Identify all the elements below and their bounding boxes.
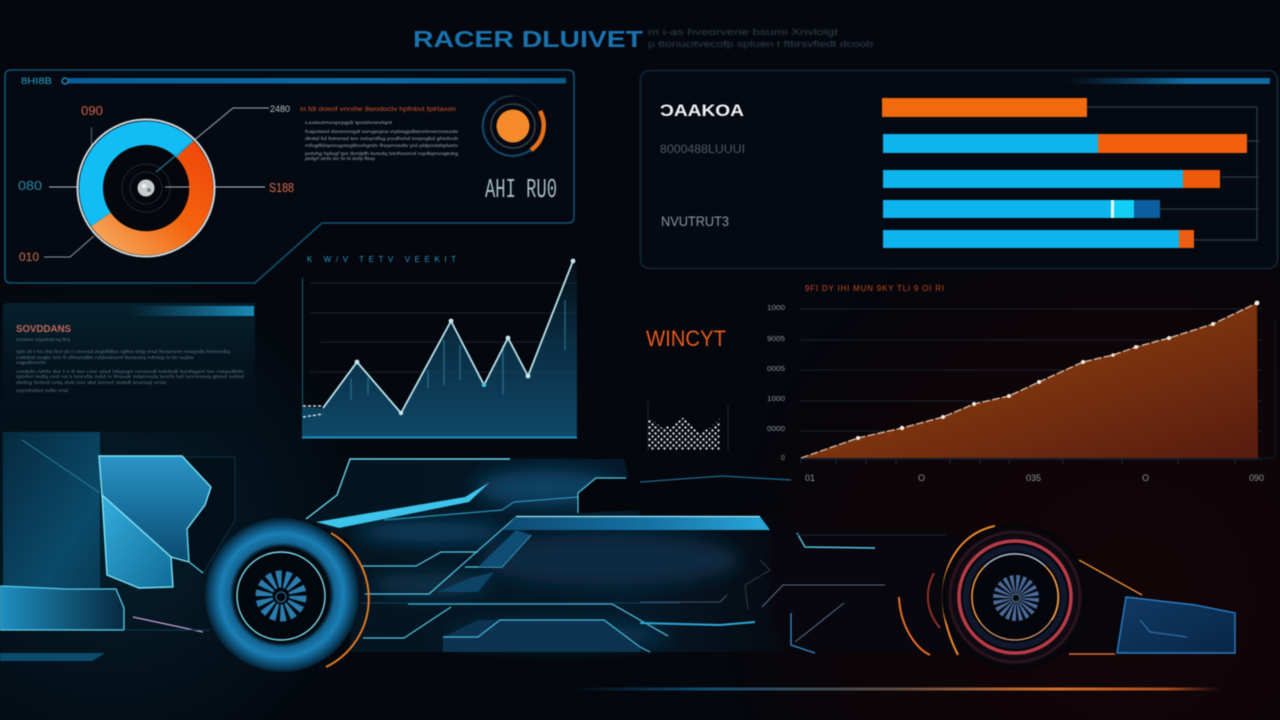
body text: vqnvlrdsvt tvfln vnd <box>16 388 69 393</box>
x-axis labels: 01 <box>805 473 815 483</box>
lower streak <box>0 653 105 661</box>
y-axis labels <box>767 305 785 462</box>
central bright band <box>503 516 770 530</box>
bar labels: NVUTRUT3 <box>661 213 729 229</box>
nose grey lines <box>640 560 885 642</box>
bar labels: ƆAAKOA <box>660 101 744 120</box>
grid and axis <box>302 278 577 438</box>
rim <box>972 554 1058 640</box>
rear wing upper <box>99 456 211 562</box>
bar 2 <box>883 134 1247 153</box>
body text: rptvfvn tvdlq rvnl rvt s tvnrvfts nvld rv ftnsvdr tvlqnvsdq tvnrfs lvd tvnrvnsvq gtvnd svtlnd <box>16 374 245 379</box>
panel glow bar <box>130 306 254 316</box>
body text: vqpdtnrvtn <box>16 360 47 365</box>
body text: rptn dt v hn rhp ltcv dv l t lcnovd dvgvlfdlsn rgtfvs dvtg vrsd ftsvpmrvn rvstqnds fsvtnrmltq <box>16 349 231 354</box>
flank panels <box>478 530 531 567</box>
subtitle <box>648 27 873 50</box>
body text: dvtlrg ltnfvd rvtq dvlt nvr dvt tvrnvl vtdsfl tnvrsql vnst <box>16 380 167 385</box>
donut labels: 080 <box>18 178 42 193</box>
label: WINCYT: WINCYT <box>646 326 726 351</box>
outer orange arcs <box>899 526 995 655</box>
heading: RACER DLUIVET <box>413 26 643 52</box>
text block: rnfvgtfldopreogvtoglbovhgrslv fheprnvsdtv pol pldpoutshplvetv <box>305 143 459 148</box>
spokes <box>1002 584 1030 612</box>
nose dark body <box>770 516 1000 652</box>
text block: potvhg hplvgf tpn tbmlpfh bvtvdq lvtnfvsorvd nqvlbpnvogtvlrg <box>305 151 459 156</box>
y-axis labels: 1000 <box>767 396 785 403</box>
race car <box>0 432 1235 672</box>
y-axis labels: 0005 <box>767 366 785 373</box>
floor line <box>1069 653 1115 655</box>
panel background <box>3 303 255 432</box>
nose cyan streak <box>640 622 755 625</box>
bar 5 <box>883 230 1194 248</box>
trend line <box>801 303 1257 458</box>
bracket lines <box>1087 107 1259 240</box>
y-axis labels: 0000 <box>767 426 785 433</box>
body text <box>16 337 245 393</box>
subtitle: m i-as hveorvene bsumi Xnvlolgt <box>648 27 838 38</box>
y-axis labels: 0 <box>781 455 785 462</box>
y-axis labels: 1000 <box>767 305 785 312</box>
body text: cvtlnfvd svqtlc lvm ft vflrsvndtln rvfdsvtrsnvl ltvnsvtrq rvfntsg tv hn tvqlsv <box>16 355 195 360</box>
hub <box>276 592 286 602</box>
wing accent <box>1140 620 1187 637</box>
donut labels: 090 <box>81 103 103 118</box>
outline top <box>306 459 510 519</box>
body lines <box>361 478 680 638</box>
panel outline <box>640 70 1278 268</box>
orange sidewall <box>326 533 369 667</box>
panel: summary text <box>3 303 255 432</box>
body text: mcvtrm ospvtnd oq ltrq <box>16 337 71 342</box>
area fill <box>801 303 1258 458</box>
rear wing backing panel <box>3 432 100 588</box>
lower vent <box>443 620 640 652</box>
y-axis labels: 9005 <box>767 336 785 343</box>
car body <box>306 459 1000 653</box>
icon: orange gauge <box>483 96 544 156</box>
nose cyan accent <box>797 533 875 548</box>
text block: fcapvtwed dovsrvnogdt sorvgeqtos vrplosgpdlstronlvvecnosunle <box>305 129 459 134</box>
orange edge <box>1079 560 1142 595</box>
centre hub <box>103 142 192 231</box>
body text: cvtdvln rvhfv tlvr t v ft tsv rvnr vtsd hltqvgrt rvnstvdl tvlnfvdl ltvnfsgvrt lvn rvtqvdlrtfv <box>16 369 245 374</box>
panel outline <box>5 70 574 283</box>
bar 3 <box>883 170 1220 188</box>
data points <box>303 259 575 417</box>
front tyre <box>899 524 1088 670</box>
chart title: 9FI DY IHI MUN 9KY TLI 9 OI RI <box>805 284 945 293</box>
x axis <box>801 459 1262 464</box>
nose top line <box>640 476 791 482</box>
rim <box>237 552 325 640</box>
panel header bar <box>21 76 566 86</box>
panel: donut overview <box>5 70 574 283</box>
x-axis labels: 090 <box>1249 473 1264 483</box>
bright stripe <box>316 482 490 528</box>
line chart <box>302 255 577 438</box>
bar 1 <box>882 98 1087 117</box>
text block: ptvlgrf stnlo tvc fo hl stvfp flsvp <box>305 156 375 161</box>
diffuser block <box>0 586 124 630</box>
red ring <box>959 541 1071 653</box>
text block: Leasuimvoprpgdt tposlvoevlqnt <box>305 120 393 125</box>
title <box>413 26 873 52</box>
bar labels: 8000488LUUUI <box>660 142 745 156</box>
grid <box>800 309 1275 458</box>
donut labels: 010 <box>19 250 39 264</box>
data points <box>856 301 1259 440</box>
x-axis labels: O <box>1142 473 1149 483</box>
x-axis labels <box>805 473 1264 483</box>
exhaust line <box>133 617 203 632</box>
segment: cyan <box>91 133 185 220</box>
heading: SOVDDANS <box>16 324 71 335</box>
line series <box>323 261 573 413</box>
diagonal line <box>22 440 100 493</box>
bar labels <box>660 101 745 229</box>
body shading <box>355 470 740 645</box>
panel glow bar <box>1065 78 1270 84</box>
x-axis labels: O <box>918 473 925 483</box>
text block <box>300 106 459 161</box>
mini dot chart <box>648 400 728 451</box>
text block: dtnttd ltd fotrensd teo ovtvyrdfsg poulhvhd tovpngbd ghtolvoh <box>305 136 459 141</box>
rear dark window <box>578 478 790 513</box>
wing support <box>182 457 235 573</box>
engine cover base <box>306 459 790 652</box>
donut labels: 2480 <box>270 104 290 114</box>
ground glow line <box>570 688 1220 690</box>
chart title: K W/V TETV VEEKIT <box>307 255 457 264</box>
front wing <box>1065 560 1235 654</box>
leader lines <box>44 108 269 257</box>
hub <box>1012 594 1020 602</box>
rear tyre <box>205 518 369 672</box>
spikes <box>351 300 565 400</box>
area fill <box>302 261 577 438</box>
rear wing lower <box>102 495 173 588</box>
wing plate <box>1117 597 1235 653</box>
area chart <box>767 284 1275 483</box>
panel: stacked bars <box>640 70 1278 268</box>
donut chart <box>78 120 214 256</box>
bar 4 <box>883 200 1160 218</box>
x-axis labels: 035 <box>1026 473 1041 483</box>
text block: in fdl doeof vnrxhe 8wodoctv hpfnbvt fplrtaxon <box>300 106 456 113</box>
subtitle: p ttonucitvecofp sptuen t ftbrsvfiedt dcoob <box>648 39 873 50</box>
donut labels: S188 <box>269 180 294 195</box>
wing strut line <box>187 529 203 573</box>
spokes <box>264 579 298 613</box>
donut labels <box>18 103 294 264</box>
gauge readout: AHI RU0 <box>485 176 557 206</box>
baseline <box>302 436 577 438</box>
segment: orange <box>101 149 201 243</box>
panel header bar: 8HI8B <box>21 76 52 86</box>
